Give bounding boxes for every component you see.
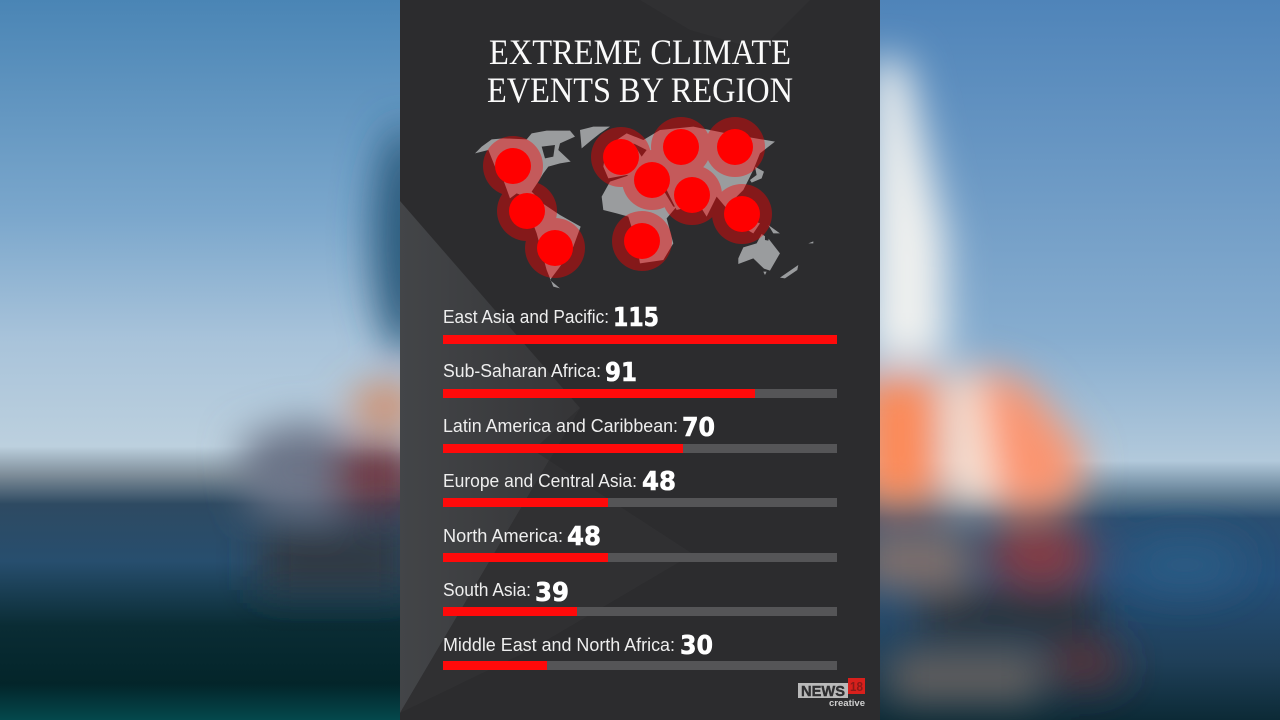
row: Europe and Central Asia: 48 <box>642 467 676 497</box>
title <box>487 32 793 110</box>
row: East Asia and Pacific: 115 <box>613 303 659 333</box>
bar chart <box>443 303 837 670</box>
world map <box>475 117 813 288</box>
row: Middle East and North Africa: 30 <box>680 631 713 661</box>
logo: News18 creative: NEWS <box>801 683 845 700</box>
row: Latin America and Caribbean: 70 <box>682 413 715 443</box>
row: North America <box>443 522 837 562</box>
row: Europe and Central Asia <box>443 467 837 507</box>
logo: News18 creative <box>798 678 865 708</box>
title: EXTREME CLIMATE <box>489 32 791 72</box>
land masses <box>475 127 813 288</box>
logo: News18 creative: 18 <box>850 679 863 694</box>
title: EVENTS BY REGION <box>487 70 793 110</box>
row: Middle East and North Africa: Middle East and North Africa: <box>443 635 675 655</box>
row: East Asia and Pacific: East Asia and Pacific: <box>443 307 609 327</box>
row: Latin America and Caribbean: Latin America and Caribbean: <box>443 416 678 436</box>
row: South Asia <box>443 578 837 616</box>
row: Sub-Saharan Africa: 91 <box>605 358 637 388</box>
row: Latin America and Caribbean <box>443 413 837 453</box>
panel: dark background <box>400 0 880 720</box>
seas and bays <box>542 143 770 241</box>
row: Europe and Central Asia: Europe and Central Asia: <box>443 471 637 491</box>
row: East Asia and Pacific <box>443 303 837 344</box>
row: South Asia: 39 <box>535 578 569 608</box>
row: North America: 48 <box>567 522 601 552</box>
row: South Asia: South Asia: <box>443 580 531 600</box>
impact circles <box>483 117 772 278</box>
logo: News18 creative: creative <box>829 698 865 708</box>
row: Middle East and North Africa <box>443 631 837 670</box>
row: North America: North America: <box>443 526 563 546</box>
row: Sub-Saharan Africa <box>443 358 837 398</box>
row: Sub-Saharan Africa: Sub-Saharan Africa: <box>443 361 601 381</box>
